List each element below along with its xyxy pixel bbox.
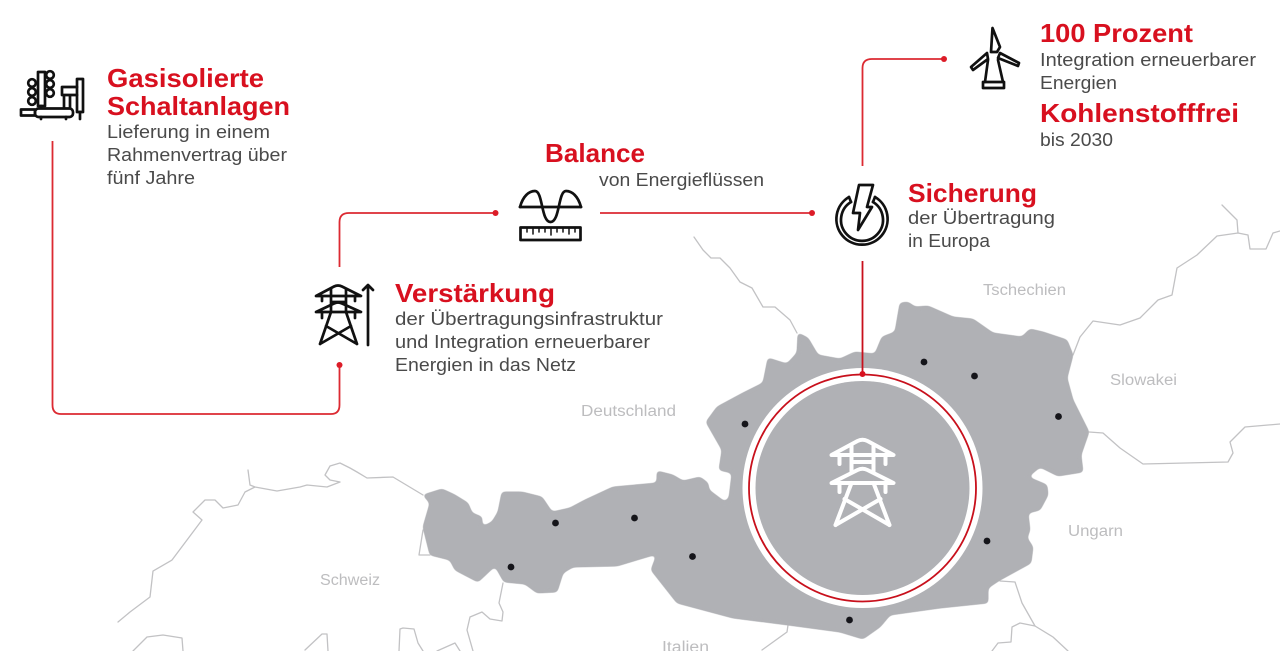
body text xyxy=(107,121,287,188)
connector dot xyxy=(809,210,815,216)
map country labels xyxy=(320,282,1177,651)
heading: Gasisolierte xyxy=(107,63,264,93)
heading 2: Kohlenstofffrei xyxy=(1040,98,1239,128)
map location dots xyxy=(508,359,1062,623)
icon: sine wave over ruler xyxy=(520,191,581,240)
icon: white pylon in circle xyxy=(832,440,894,525)
map country labels: Schweiz xyxy=(320,572,380,589)
body text: in Europa xyxy=(908,230,991,251)
connector dot xyxy=(336,362,342,368)
body text xyxy=(908,207,1055,251)
heading line 2: Schaltanlagen xyxy=(107,91,290,121)
body text: Integration erneuerbarer xyxy=(1040,49,1256,70)
icon: power symbol with lightning bolt xyxy=(836,185,888,245)
connector: security to renewable xyxy=(862,59,944,166)
icon: wind turbine xyxy=(971,28,1019,88)
panel: renewables and carbon free xyxy=(971,18,1256,150)
body text xyxy=(1040,49,1256,93)
heading: Sicherung xyxy=(908,178,1037,208)
connector: reinforcement to balance xyxy=(340,213,495,267)
connector dot xyxy=(492,210,498,216)
body text: Energien in das Netz xyxy=(395,354,576,375)
map country labels: Slowakei xyxy=(1110,372,1177,389)
panel: security xyxy=(836,178,1055,251)
central circle with ring xyxy=(742,368,982,608)
body text xyxy=(395,308,663,375)
body text: und Integration erneuerbarer xyxy=(395,331,650,352)
map country labels: Deutschland xyxy=(581,403,676,420)
icon: pylon with up arrow xyxy=(316,285,373,345)
body text 2: bis 2030 xyxy=(1040,129,1113,150)
connector: security to map circle xyxy=(862,261,864,374)
icon: switchgear xyxy=(21,71,83,119)
body text: fünf Jahre xyxy=(107,167,195,188)
heading: 100 Prozent xyxy=(1040,18,1193,48)
neighbouring country borders xyxy=(118,205,1280,651)
map country labels: Ungarn xyxy=(1068,523,1123,540)
heading: Balance xyxy=(545,138,645,168)
heading: Verstärkung xyxy=(395,278,555,308)
connector: balance to security xyxy=(600,212,812,214)
panel: gas-insulated switchgear xyxy=(21,63,290,188)
body text: der Übertragung xyxy=(908,207,1055,228)
map of Austria xyxy=(423,302,1089,639)
body text: Energien xyxy=(1040,72,1117,93)
map country labels: Tschechien xyxy=(983,282,1066,299)
connector: switchgear to reinforcement xyxy=(52,141,340,414)
body text: Lieferung in einem xyxy=(107,121,270,142)
body text: der Übertragungsinfrastruktur xyxy=(395,308,663,329)
body text: von Energieflüssen xyxy=(599,169,764,190)
panel: balance xyxy=(520,138,764,240)
connector dot on ring xyxy=(860,371,866,377)
panel: reinforcement xyxy=(316,278,663,375)
body text: Rahmenvertrag über xyxy=(107,144,287,165)
connector dot xyxy=(941,56,947,62)
